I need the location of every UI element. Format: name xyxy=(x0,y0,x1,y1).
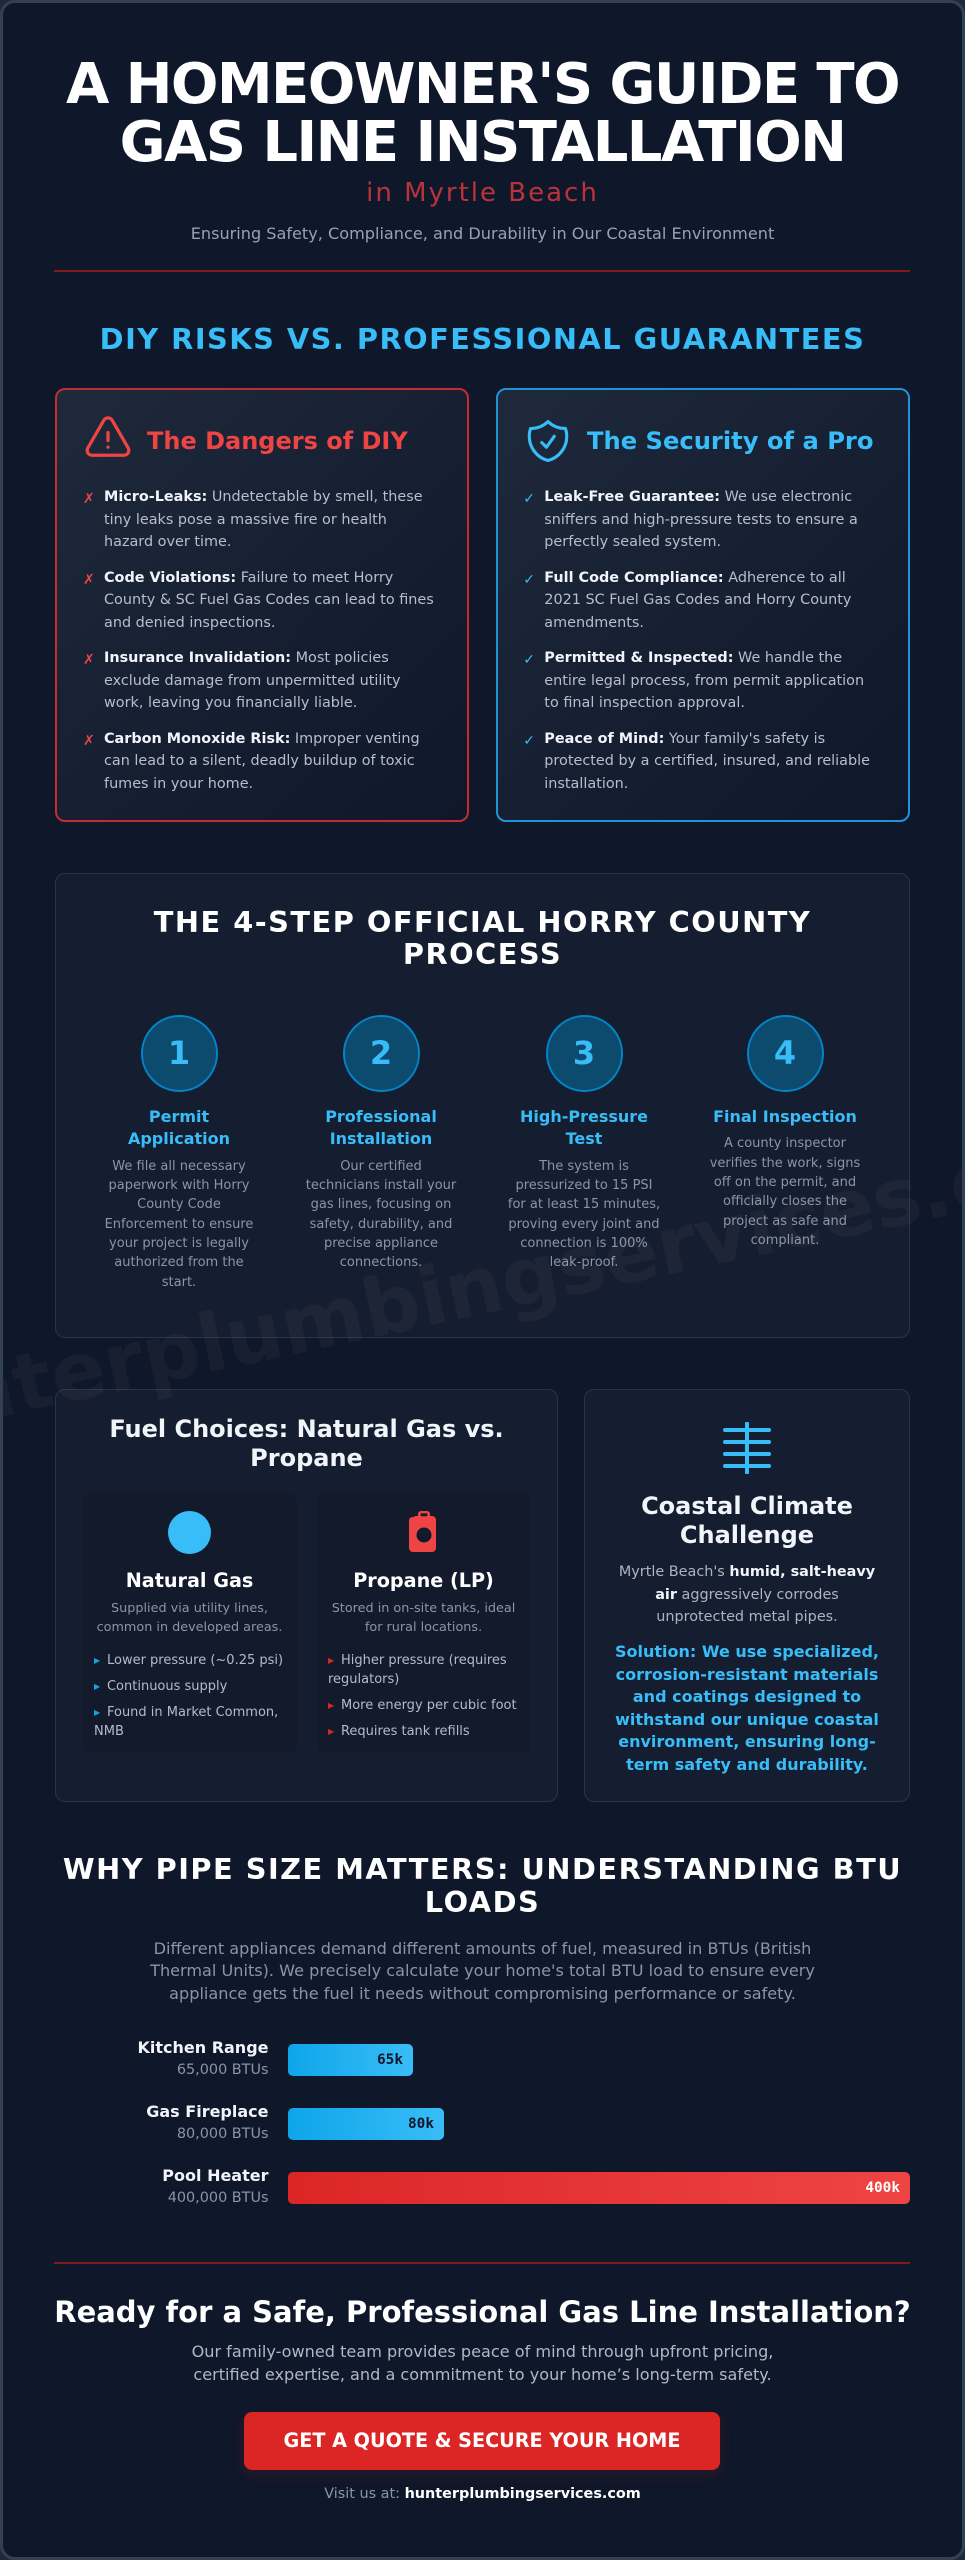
text: BTU explanation: Thermal Units). We precisely calculate your home's total BTU load to ensure every xyxy=(150,1961,815,1980)
list: DIY risks: Micro-Leaks: Undetectable by smell, these xyxy=(104,489,423,505)
step 2: Installation xyxy=(330,1129,432,1148)
text: propane description: Stored in on-site tanks, ideal xyxy=(332,1601,515,1616)
heading: 4-step process: PROCESS xyxy=(403,937,562,971)
step 3: High-Pressure xyxy=(520,1107,648,1126)
icon: number 2: 2 xyxy=(370,1034,392,1072)
icon: natural gas circle xyxy=(168,1510,210,1554)
list: propane facts: ▶ Higher pressure (requires xyxy=(328,1653,507,1668)
bar label: gas fireplace: 80,000 BTUs xyxy=(177,2126,268,2142)
heading: 4-step process: THE 4-STEP OFFICIAL HORRY COUNTY xyxy=(154,905,811,939)
list: DIY risks: and denied inspections. xyxy=(104,614,275,630)
bar label: kitchen range: 65,000 BTUs xyxy=(177,2062,268,2078)
list: professional guarantees: entire legal process, from permit application xyxy=(544,672,864,688)
step 2: safety, durability, and xyxy=(310,1217,452,1232)
list: natural gas facts: ▶ Continuous supply xyxy=(94,1679,227,1694)
list: professional guarantees: 2021 SC Fuel Gas Codes and Horry County xyxy=(544,592,851,608)
heading: fuel choices xyxy=(109,1415,504,1472)
panel: 4-step process xyxy=(55,873,910,1338)
list: professional guarantees: amendments. xyxy=(544,614,644,630)
title xyxy=(66,52,899,175)
bar label: pool heater: Pool Heater xyxy=(162,2166,268,2185)
text: propane description xyxy=(332,1601,515,1635)
icon: warning triangle xyxy=(86,416,130,457)
step 2 xyxy=(306,1015,456,1270)
heading: dangers: The Dangers of DIY xyxy=(147,427,408,455)
list: professional guarantees: installation. xyxy=(544,776,628,792)
list: natural gas facts: NMB xyxy=(94,1724,124,1739)
panel: security of a pro: ✓ xyxy=(523,652,535,668)
step 4: Final Inspection xyxy=(713,1107,857,1126)
text: BTU explanation: Different appliances demand different amounts of fuel, measured in BTUs (British xyxy=(154,1938,811,1958)
step 1: paperwork with Horry xyxy=(108,1178,250,1193)
step 4: off on the permit, and xyxy=(714,1175,856,1190)
heading: natural gas: Natural Gas xyxy=(126,1569,253,1592)
icon: number 4 xyxy=(746,1015,824,1092)
text: climate solution: Solution: We use specialized, xyxy=(615,1642,879,1661)
heading: coastal climate: Coastal Climate xyxy=(641,1492,853,1520)
step 1: Permit xyxy=(149,1107,209,1126)
chart: BTU bars xyxy=(137,2038,910,2206)
list: DIY risks: Insurance Invalidation: Most policies xyxy=(104,650,389,666)
subtitle: location: in Myrtle Beach xyxy=(366,178,599,208)
text: call to action: Our family-owned team provides peace of mind through upfront pricing, xyxy=(192,2342,773,2361)
step 4: A county inspector xyxy=(724,1136,846,1151)
panel: dangers of DIY: ✗ xyxy=(83,652,95,668)
panel: coastal climate challenge xyxy=(584,1389,910,1802)
panel: security of a pro xyxy=(496,388,910,822)
step 1: your project is legally xyxy=(109,1236,249,1251)
text: natural gas description xyxy=(97,1601,282,1635)
step 3: leak-proof. xyxy=(550,1255,618,1270)
list: professional guarantees: protected by a certified, insured, and reliable xyxy=(544,753,870,769)
panel: security of a pro: ✓ xyxy=(523,491,535,507)
text: climate solution: corrosion-resistant materials xyxy=(616,1664,878,1684)
step 1: We file all necessary xyxy=(112,1159,246,1174)
list: professional guarantees: Permitted & Inspected: We handle the xyxy=(544,650,842,666)
heading: call to action: Ready for a Safe, Professional Gas Line Installation? xyxy=(54,2295,911,2329)
icon: pipe grid xyxy=(723,1422,771,1474)
list: professional guarantees xyxy=(523,489,870,792)
list: professional guarantees: Leak-Free Guarantee: We use electronic xyxy=(544,489,852,505)
list: propane facts: ▶ Requires tank refills xyxy=(328,1724,470,1739)
list: DIY risks: Code Violations: Failure to meet Horry xyxy=(104,570,393,586)
tagline: Ensuring Safety, Compliance, and Durability in Our Coastal Environment xyxy=(191,224,774,243)
step 1: County Code xyxy=(137,1197,221,1212)
list: natural gas facts: ▶ Found in Market Common, xyxy=(94,1705,278,1720)
step 3: The system is xyxy=(539,1159,629,1174)
panel: dangers of DIY xyxy=(55,388,469,822)
bar label: gas fireplace: Gas Fireplace xyxy=(146,2102,268,2121)
text: call to action: certified expertise, and a commitment to your home’s long-term safety. xyxy=(193,2365,772,2384)
icon: number 3: 3 xyxy=(573,1034,595,1072)
text: climate solution: term safety and durability. xyxy=(626,1754,868,1774)
text: climate problem: air aggressively corrodes xyxy=(655,1586,839,1602)
text: climate problem: unprotected metal pipes. xyxy=(656,1609,838,1625)
step 4: verifies the work, signs xyxy=(710,1156,860,1171)
step 1: Enforcement to ensure xyxy=(105,1217,253,1232)
heading: 4-step process xyxy=(154,905,811,971)
step 1: Application xyxy=(128,1129,230,1148)
title: A HOMEOWNER'S GUIDE TO xyxy=(66,52,899,117)
column: natural gas xyxy=(82,1493,297,1753)
list: professional guarantees: perfectly sealed system. xyxy=(544,534,721,550)
heading: security: The Security of a Pro xyxy=(587,427,873,455)
step 2: precise appliance xyxy=(324,1236,438,1251)
text: website: Visit us at: hunterplumbingservices.com xyxy=(324,2486,641,2502)
text: climate solution: withstand our unique coastal xyxy=(615,1710,879,1728)
button: get a quote: GET A QUOTE & SECURE YOUR HOME xyxy=(284,2429,680,2452)
list: natural gas facts: ▶ Lower pressure (~0.25 psi) xyxy=(94,1653,283,1668)
text: climate problem xyxy=(619,1564,875,1625)
heading: coastal climate xyxy=(641,1492,853,1549)
list: professional guarantees: Full Code Compliance: Adherence to all xyxy=(544,570,846,586)
list: DIY risks: exclude damage from unpermitted utility xyxy=(104,672,401,688)
step 2: technicians install your xyxy=(306,1178,456,1193)
step 1 xyxy=(105,1015,253,1290)
text: climate solution: and coatings designed to xyxy=(633,1687,861,1706)
step 4: compliant. xyxy=(751,1233,819,1248)
icon: number 4: 4 xyxy=(774,1034,796,1072)
panel: dangers of DIY: ✗ xyxy=(83,732,95,748)
text: propane description: for rural locations. xyxy=(365,1620,482,1635)
step 1: authorized from the xyxy=(114,1255,244,1270)
bar label: kitchen range xyxy=(137,2038,268,2078)
step 3: for at least 15 minutes, xyxy=(508,1197,660,1212)
text: BTU explanation xyxy=(150,1938,815,2002)
heading: propane: Propane (LP) xyxy=(353,1569,494,1592)
list: DIY risks: work, leaving you financially liable. xyxy=(104,695,357,711)
step 3: connection is 100% xyxy=(520,1236,648,1251)
step 3 xyxy=(508,1015,660,1270)
heading: pipe size and BTU loads: LOADS xyxy=(425,1885,540,1919)
list: DIY risks: can lead to a silent, deadly buildup of toxic xyxy=(104,753,415,769)
bar label: pool heater: 400,000 BTUs xyxy=(168,2190,268,2206)
step 3: Test xyxy=(566,1129,602,1148)
panel: security of a pro: ✓ xyxy=(523,572,535,588)
text: climate solution xyxy=(615,1642,879,1774)
heading: fuel choices: Fuel Choices: Natural Gas vs. xyxy=(109,1415,504,1443)
step 4 xyxy=(710,1015,860,1248)
icon: number 1: 1 xyxy=(168,1034,190,1072)
panel: security of a pro: ✓ xyxy=(523,732,535,748)
list: DIY risks: County & SC Fuel Gas Codes can lead to fines xyxy=(104,592,434,608)
list: DIY risks: Carbon Monoxide Risk: Improper venting xyxy=(104,730,420,746)
bar label: gas fireplace xyxy=(146,2102,268,2142)
bar: 80k: 80k xyxy=(408,2116,434,2132)
icon: number 3 xyxy=(546,1015,622,1092)
list: professional guarantees: to final inspection approval. xyxy=(544,695,745,711)
list: professional guarantees: sniffers and high-pressure tests to ensure a xyxy=(544,512,858,528)
bar: 80k xyxy=(288,2108,444,2140)
icon: number 2 xyxy=(342,1015,420,1092)
list: propane facts: ▶ More energy per cubic foot xyxy=(328,1698,517,1713)
list: DIY risks: tiny leaks pose a massive fire or health xyxy=(104,512,387,528)
title: GAS LINE INSTALLATION xyxy=(120,110,845,175)
panel: dangers of DIY: ✗ xyxy=(83,491,95,507)
button: get a quote xyxy=(244,2412,720,2470)
bar: 65k xyxy=(288,2044,413,2076)
panel: fuel choices xyxy=(55,1389,558,1802)
text: natural gas description: Supplied via utility lines, xyxy=(111,1601,268,1616)
step 4: project as safe and xyxy=(723,1214,847,1229)
list: DIY risks xyxy=(83,489,434,792)
heading: DIY risks vs professional guarantees: DIY RISKS VS. PROFESSIONAL GUARANTEES xyxy=(100,322,865,356)
icon: shield check xyxy=(528,420,568,462)
heading: fuel choices: Propane xyxy=(250,1444,363,1472)
bar: 400k xyxy=(288,2172,910,2204)
bar label: kitchen range: Kitchen Range xyxy=(137,2038,268,2057)
step 2: connections. xyxy=(340,1255,422,1270)
step 3: pressurized to 15 PSI xyxy=(515,1178,653,1193)
text: natural gas description: common in developed areas. xyxy=(97,1620,282,1635)
list: natural gas facts xyxy=(94,1653,283,1739)
heading: coastal climate: Challenge xyxy=(680,1521,814,1549)
list: DIY risks: fumes in your home. xyxy=(104,776,253,792)
list: propane facts xyxy=(328,1653,517,1739)
step 2: Our certified xyxy=(340,1159,422,1174)
bar: 400k: 400k xyxy=(865,2180,900,2196)
text: climate problem: Myrtle Beach's humid, salt-heavy xyxy=(619,1564,875,1580)
text: call to action xyxy=(192,2342,773,2384)
panel: dangers of DIY: ✗ xyxy=(83,572,95,588)
step 3: proving every joint and xyxy=(508,1217,660,1232)
icon: number 1 xyxy=(140,1015,218,1092)
step 2: Professional xyxy=(325,1107,437,1126)
text: BTU explanation: appliance gets the fuel it needs without compromising performance or safety. xyxy=(169,1984,796,2002)
heading: pipe size and BTU loads: WHY PIPE SIZE MATTERS: UNDERSTANDING BTU xyxy=(63,1852,902,1886)
step 4: officially closes the xyxy=(723,1194,847,1209)
text: climate solution: environment, ensuring long- xyxy=(618,1732,876,1751)
list: professional guarantees: Peace of Mind: Your family's safety is xyxy=(544,730,825,746)
list: DIY risks: hazard over time. xyxy=(104,534,231,550)
step 1: start. xyxy=(162,1275,196,1290)
list: propane facts: regulators) xyxy=(328,1672,399,1687)
icon: propane tank xyxy=(409,1511,436,1552)
column: propane xyxy=(317,1493,530,1753)
bar label: pool heater xyxy=(162,2166,268,2206)
heading: pipe size and BTU loads xyxy=(63,1852,902,1919)
bar: 65k: 65k xyxy=(377,2052,403,2068)
step 2: gas lines, focusing on xyxy=(311,1197,451,1212)
